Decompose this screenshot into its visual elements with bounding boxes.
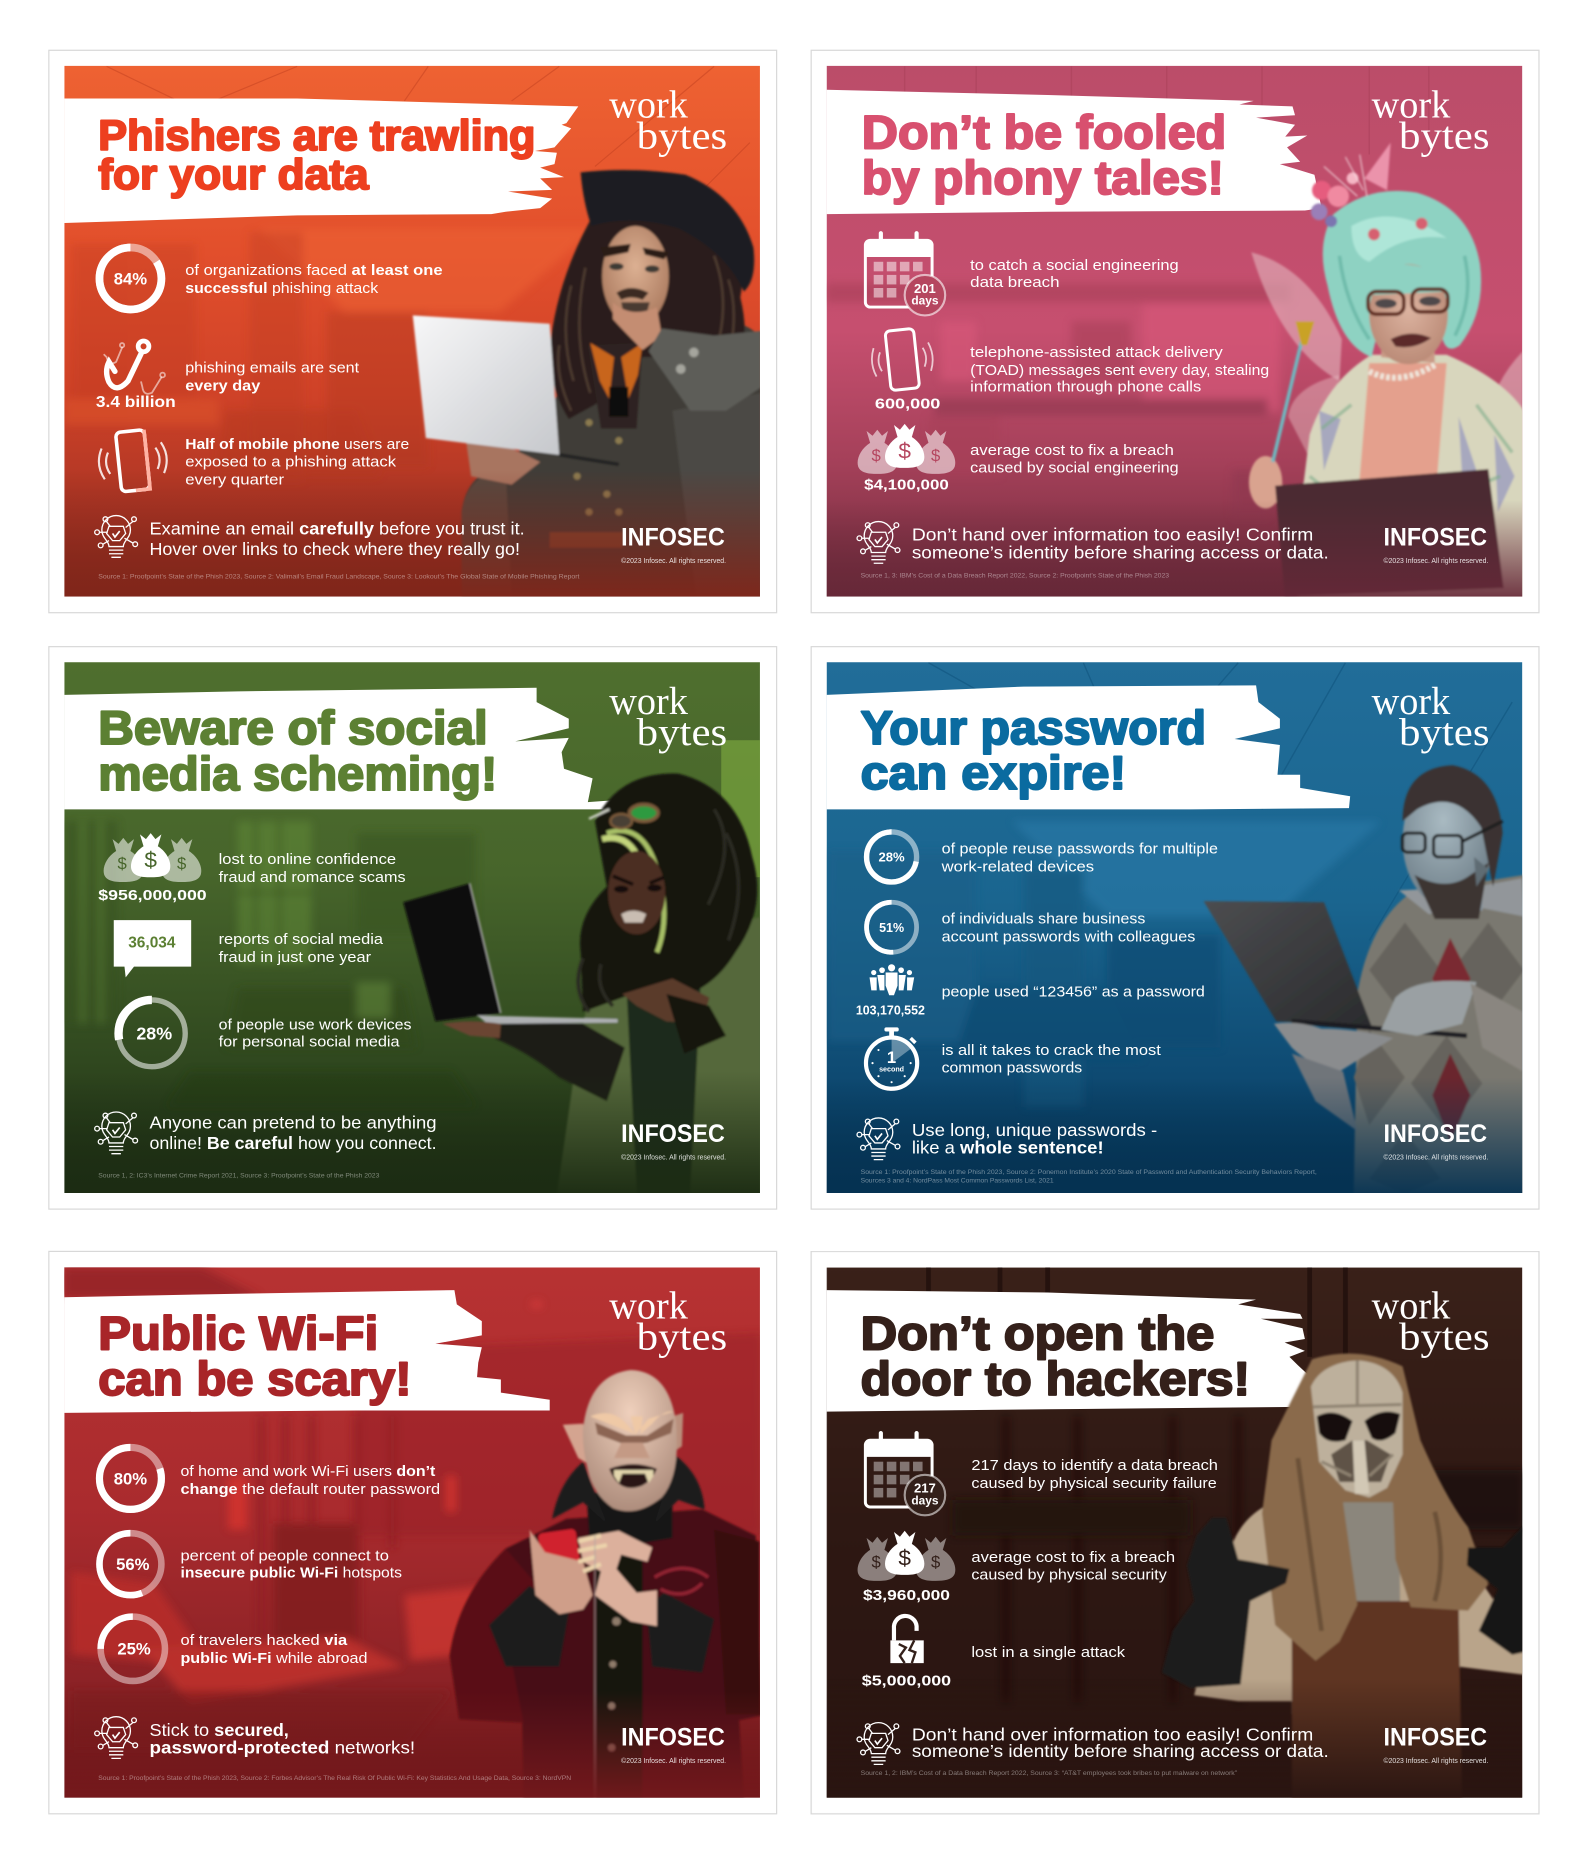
icon: progress ring xyxy=(867,902,917,952)
sources: Source 1: Proofpoint’s State of the Phish 2023, Source 2: Valimail’s Email Fraud Landscape, Source 3: Lookout’s The Global State of Mobile Phishing Report xyxy=(98,574,580,581)
tip xyxy=(857,522,1329,563)
character: pirate with laptop xyxy=(64,170,762,597)
icon: money bags xyxy=(858,1531,955,1581)
logo: work bytes: work xyxy=(609,1284,688,1328)
icon: lightbulb xyxy=(95,1717,138,1758)
logo: work bytes: bytes xyxy=(1399,710,1490,754)
icon: money bags: $ xyxy=(144,848,157,873)
tip text xyxy=(912,525,1329,562)
title banner xyxy=(827,1290,1314,1412)
character: fairy godmother xyxy=(827,143,1524,597)
title: Beware of social xyxy=(98,702,488,755)
stat text: caused by physical security xyxy=(971,1567,1167,1584)
stat text: lost to online confidence xyxy=(219,851,396,868)
office background xyxy=(64,66,760,597)
stat text xyxy=(940,840,1218,875)
title banner xyxy=(827,90,1322,214)
stat text: caused by physical security failure xyxy=(971,1475,1217,1492)
calendar value xyxy=(911,281,939,308)
stat text xyxy=(180,1548,402,1581)
stat text: of people reuse passwords for multiple xyxy=(942,840,1218,857)
panel: public wi-fi xyxy=(49,1251,777,1814)
icon: vibrating phone xyxy=(869,327,936,392)
sources: Sources 3 and 4: NordPass Most Common Passwords List, 2021 xyxy=(861,1177,1054,1184)
doorway background xyxy=(827,1267,1524,1798)
sources: Source 1, 2: IC3’s Internet Crime Report 2021, Source 3: Proofpoint’s State of the Phish 2023 xyxy=(98,1173,380,1180)
stat text xyxy=(185,262,443,297)
stat text: 217 days to identify a data breach xyxy=(971,1457,1218,1474)
logo: infosec: INFOSEC xyxy=(621,1723,725,1751)
icon: crowd of people xyxy=(870,964,914,995)
logo: infosec: INFOSEC xyxy=(621,1120,725,1148)
logo: work bytes: bytes xyxy=(637,710,727,754)
stat text xyxy=(219,931,384,966)
stat text xyxy=(942,911,1195,946)
stat text xyxy=(219,851,406,886)
title banner xyxy=(64,99,578,223)
calendar value: 217 xyxy=(914,1481,936,1496)
stat: half of mobile phone users xyxy=(96,428,409,494)
ring value: 56% xyxy=(116,1555,150,1574)
title: Phishers are trawling xyxy=(98,112,535,160)
logo: infosec: ©2023 Infosec. All rights reserved. xyxy=(621,1756,726,1765)
logo: work bytes: bytes xyxy=(637,114,727,158)
stat: 600,000 xyxy=(869,327,1269,412)
character: zombie man with laptop xyxy=(827,765,1524,1194)
stat text: phishing emails are sent xyxy=(185,360,360,377)
stat: 25% xyxy=(101,1617,367,1681)
icon: lightbulb xyxy=(95,516,138,557)
title: media scheming! xyxy=(98,748,497,801)
icon: progress ring xyxy=(99,247,161,309)
tip text xyxy=(912,1725,1329,1761)
card frame xyxy=(49,50,777,613)
stat text: average cost to fix a breach xyxy=(970,442,1174,459)
title: Don’t open the xyxy=(861,1308,1214,1361)
logo: infosec xyxy=(621,1723,726,1765)
stat text: reports of social media xyxy=(219,931,384,948)
tip text: password-protected networks! xyxy=(149,1738,415,1758)
logo: work bytes: work xyxy=(1372,679,1451,723)
icon: money bags: $ xyxy=(898,438,911,463)
title: Don’t be fooled xyxy=(862,107,1226,160)
stat text: fraud in just one year xyxy=(219,949,371,966)
stat text: lost in a single attack xyxy=(971,1644,1126,1661)
stat: $4,100,000 xyxy=(858,424,1179,493)
icon: progress ring xyxy=(99,1533,161,1595)
tip text: Anyone can pretend to be anything xyxy=(149,1113,437,1133)
stat text: fraud and romance scams xyxy=(219,869,406,886)
logo: infosec: ©2023 Infosec. All rights reserved. xyxy=(1384,1756,1488,1765)
stat text: common passwords xyxy=(942,1060,1082,1077)
title: door to hackers! xyxy=(861,1353,1250,1406)
logo: work bytes xyxy=(609,679,727,754)
icon: lightbulb xyxy=(95,1112,138,1154)
title xyxy=(98,112,535,199)
icon: lightbulb xyxy=(857,1118,900,1160)
stat value: $4,100,000 xyxy=(864,476,949,493)
tip text xyxy=(149,519,525,559)
logo: work bytes xyxy=(609,83,727,158)
calendar value: days xyxy=(911,1494,939,1508)
sources: Source 1, 2: IBM’s Cost of a Data Breach Report 2022, Source 3: “AT&T employees took bribes to put malware on network” xyxy=(861,1770,1237,1777)
icon: fishing hooks xyxy=(104,341,165,394)
icon: calendar xyxy=(865,233,945,315)
tip text: Examine an email carefully before you trust it. xyxy=(149,519,525,539)
icon: money bags: $ xyxy=(871,446,881,465)
stat text: is all it takes to crack the most xyxy=(942,1042,1162,1059)
stat: 201 days xyxy=(865,233,1179,315)
icon: progress ring xyxy=(867,832,917,882)
logo: work bytes: work xyxy=(609,679,688,723)
logo: infosec: ©2023 Infosec. All rights reserved. xyxy=(621,1153,726,1162)
stat value: 103,170,552 xyxy=(856,1002,925,1017)
logo: work bytes xyxy=(1372,83,1490,158)
icon: progress ring xyxy=(119,1000,185,1067)
stat text xyxy=(180,1632,367,1667)
tip text: Stick to secured, xyxy=(149,1720,289,1740)
stat text: public Wi-Fi while abroad xyxy=(180,1650,367,1667)
icon: lightbulb xyxy=(857,522,900,563)
tip xyxy=(95,1717,415,1758)
stat text: of individuals share business xyxy=(942,911,1145,928)
icon: money bags: $ xyxy=(931,446,940,465)
tip text xyxy=(912,1120,1157,1158)
ring value: 28% xyxy=(878,850,905,865)
panel: social media scheming xyxy=(49,647,777,1209)
stat text: insecure public Wi-Fi hotspots xyxy=(180,1564,402,1581)
sources: Source 1: Proofpoint’s State of the Phish 2023, Source 2: Ponemon Institute’s 2020 State of Password and Authentication Security Behaviors Report, xyxy=(861,1169,1317,1176)
stopwatch value xyxy=(879,1048,904,1073)
logo: work bytes xyxy=(609,1284,727,1359)
icon: money bags: $ xyxy=(871,1553,881,1572)
icon: vibrating phone xyxy=(96,428,170,494)
tip text: someone’s identity before sharing access or data. xyxy=(912,542,1329,562)
stat text: every day xyxy=(185,377,261,394)
ring value: 84% xyxy=(114,269,147,288)
logo: infosec xyxy=(1384,1120,1488,1162)
stat: $3,960,000 xyxy=(858,1531,1175,1604)
icon: money bags: $ xyxy=(931,1553,940,1572)
stopwatch value: second xyxy=(879,1065,904,1073)
panel: phishers are trawling xyxy=(49,50,777,613)
logo: infosec: INFOSEC xyxy=(1384,1723,1487,1751)
stat text: for personal social media xyxy=(219,1033,400,1050)
stat: 1 second xyxy=(866,1027,1162,1089)
icon: speech bubble xyxy=(114,920,191,977)
stat text: information through phone calls xyxy=(970,379,1201,396)
logo: work bytes: work xyxy=(1372,83,1451,127)
tip text: online! Be careful how you connect. xyxy=(149,1133,437,1153)
stat: 36,034 xyxy=(114,920,384,977)
stat text: people used “123456” as a password xyxy=(942,983,1205,1000)
stat text: data breach xyxy=(970,274,1060,291)
tip text xyxy=(149,1720,415,1758)
logo: infosec xyxy=(1384,1723,1488,1765)
logo: infosec xyxy=(1384,523,1488,565)
logo: work bytes: work xyxy=(1372,1284,1451,1328)
logo: work bytes: bytes xyxy=(637,1315,727,1359)
stat value: $3,960,000 xyxy=(863,1587,950,1604)
icon: calendar xyxy=(865,1433,945,1515)
title xyxy=(862,107,1226,205)
logo: infosec: INFOSEC xyxy=(621,523,725,551)
icon: broken padlock xyxy=(890,1616,924,1663)
logo: infosec: INFOSEC xyxy=(1384,1120,1487,1148)
stat: $5,000,000 xyxy=(862,1616,1126,1690)
stat: $956,000,000 xyxy=(98,833,406,904)
stat text xyxy=(185,360,360,394)
icon: progress ring xyxy=(99,1447,161,1509)
icon: money bags: $ xyxy=(117,854,127,873)
stat text: change the default router password xyxy=(180,1481,440,1498)
stat text: percent of people connect to xyxy=(180,1548,389,1565)
logo: infosec: ©2023 Infosec. All rights reserved. xyxy=(1384,556,1488,565)
stat text: of home and work Wi-Fi users don’t xyxy=(180,1463,435,1480)
stat value: 3.4 billion xyxy=(96,394,176,411)
tip text xyxy=(149,1113,437,1153)
tip text: Hover over links to check where they really go! xyxy=(149,539,520,559)
tip text: like a whole sentence! xyxy=(912,1138,1104,1158)
tip xyxy=(857,1723,1329,1764)
calendar value xyxy=(911,1481,939,1508)
title xyxy=(98,1308,412,1406)
icon: money bags: $ xyxy=(898,1545,911,1570)
title xyxy=(98,702,497,801)
office background xyxy=(827,662,1522,1193)
stat: 217 days xyxy=(865,1433,1218,1515)
logo: work bytes xyxy=(1372,1284,1490,1359)
stat text: work-related devices xyxy=(940,858,1094,875)
stat value: $956,000,000 xyxy=(98,887,207,904)
calendar value: days xyxy=(911,294,939,308)
tip text: someone’s identity before sharing access or data. xyxy=(912,1741,1329,1761)
stat text: of people use work devices xyxy=(219,1017,412,1034)
office background xyxy=(64,662,761,1193)
sources: Source 1, 3: IBM’s Cost of a Data Breach Report 2022, Source 2: Proofpoint’s State of the Phish 2023 xyxy=(861,573,1170,580)
stat: 56% xyxy=(99,1533,402,1595)
icon: progress ring xyxy=(101,1617,165,1681)
title: can expire! xyxy=(861,747,1126,800)
tip text: Don’t hand over information too easily! Confirm xyxy=(912,525,1313,545)
stat text: successful phishing attack xyxy=(185,280,379,297)
stat text xyxy=(970,257,1179,291)
stat text: telephone-assisted attack delivery xyxy=(970,344,1223,361)
stat text xyxy=(185,436,409,489)
hotel background xyxy=(64,1267,762,1798)
ring value: 51% xyxy=(879,921,904,935)
tip text: Use long, unique passwords - xyxy=(912,1120,1157,1140)
character: vampire with phone xyxy=(64,1370,762,1798)
panel: phony tales xyxy=(811,50,1539,613)
stat: 28% xyxy=(867,832,1218,882)
stat text xyxy=(971,1549,1175,1584)
title: for your data xyxy=(98,151,370,199)
stat value: 600,000 xyxy=(875,395,940,412)
tip xyxy=(857,1118,1157,1160)
title banner xyxy=(64,688,637,809)
ring value: 80% xyxy=(114,1469,147,1488)
stat text: account passwords with colleagues xyxy=(942,929,1195,946)
stat: 51% xyxy=(867,902,1195,952)
ring value: 28% xyxy=(136,1023,172,1043)
stat text: average cost to fix a breach xyxy=(971,1549,1175,1566)
logo: infosec: ©2023 Infosec. All rights reserved. xyxy=(1384,1153,1488,1162)
stat: 28% xyxy=(119,1000,412,1067)
calendar value: 201 xyxy=(914,281,936,296)
icon: money bags: $ xyxy=(177,854,186,873)
logo: work bytes: work xyxy=(609,83,688,127)
stat text xyxy=(180,1463,440,1498)
character: steampunk woman with laptop xyxy=(64,773,762,1194)
title banner xyxy=(827,685,1350,809)
card frame xyxy=(811,647,1539,1209)
stat text xyxy=(970,344,1269,396)
office background xyxy=(826,66,1522,597)
stat text: exposed to a phishing attack xyxy=(185,454,397,471)
logo: work bytes xyxy=(1372,679,1490,754)
stat text: of organizations faced at least one xyxy=(185,262,443,279)
title: by phony tales! xyxy=(862,152,1224,205)
sources xyxy=(861,1169,1317,1184)
stat: 103,170,552 xyxy=(856,964,1205,1017)
logo: work bytes: bytes xyxy=(1399,1315,1490,1359)
title xyxy=(861,1308,1250,1406)
stat text: to catch a social engineering xyxy=(970,257,1179,274)
title: can be scary! xyxy=(98,1353,412,1406)
stat: 84% xyxy=(99,247,443,309)
title xyxy=(861,702,1206,800)
stat text xyxy=(219,1017,412,1050)
title: Public Wi-Fi xyxy=(98,1308,378,1361)
stat value: $5,000,000 xyxy=(862,1673,951,1690)
stat: 80% xyxy=(99,1447,440,1509)
tip text: Don’t hand over information too easily! Confirm xyxy=(912,1725,1313,1745)
tip xyxy=(95,516,525,559)
sources: Source 1: Proofpoint’s State of the Phish 2023, Source 2: Forbes Advisor’s The Real Risk Of Public Wi-Fi: Key Statistics And Usage Data, Source 3: NordVPN xyxy=(98,1775,572,1782)
stat text: Half of mobile phone users are xyxy=(185,436,409,453)
icon: stopwatch xyxy=(866,1027,917,1089)
stat text: caused by social engineering xyxy=(970,460,1179,477)
stat text: (TOAD) messages sent every day, stealing xyxy=(970,362,1269,379)
panel: password can expire xyxy=(811,647,1539,1209)
stat text xyxy=(970,442,1179,477)
icon: lightbulb xyxy=(857,1723,900,1764)
logo: infosec xyxy=(621,523,726,565)
icon: money bags xyxy=(858,424,955,474)
stopwatch value: 1 xyxy=(887,1048,896,1067)
logo: infosec xyxy=(621,1120,726,1162)
stat value: 36,034 xyxy=(128,935,176,952)
stat text: every quarter xyxy=(185,472,284,489)
logo: infosec: ©2023 Infosec. All rights reserved. xyxy=(621,556,726,565)
title: Your password xyxy=(861,702,1206,755)
character: masked burglar xyxy=(827,1354,1529,1799)
stat text xyxy=(971,1457,1218,1492)
title banner xyxy=(64,1290,550,1413)
panel: door to hackers xyxy=(811,1251,1539,1814)
logo: work bytes: bytes xyxy=(1399,114,1490,158)
tip xyxy=(95,1112,437,1154)
card frame xyxy=(811,1251,1539,1814)
card frame xyxy=(49,1251,777,1814)
stat text xyxy=(942,1042,1162,1077)
card frame xyxy=(49,647,777,1209)
stat text: of travelers hacked via xyxy=(180,1632,348,1649)
ring value: 25% xyxy=(117,1640,151,1659)
logo: infosec: INFOSEC xyxy=(1384,523,1487,551)
icon: money bags xyxy=(104,833,201,882)
stat: 3.4 billion xyxy=(96,341,360,411)
card frame xyxy=(811,50,1539,613)
